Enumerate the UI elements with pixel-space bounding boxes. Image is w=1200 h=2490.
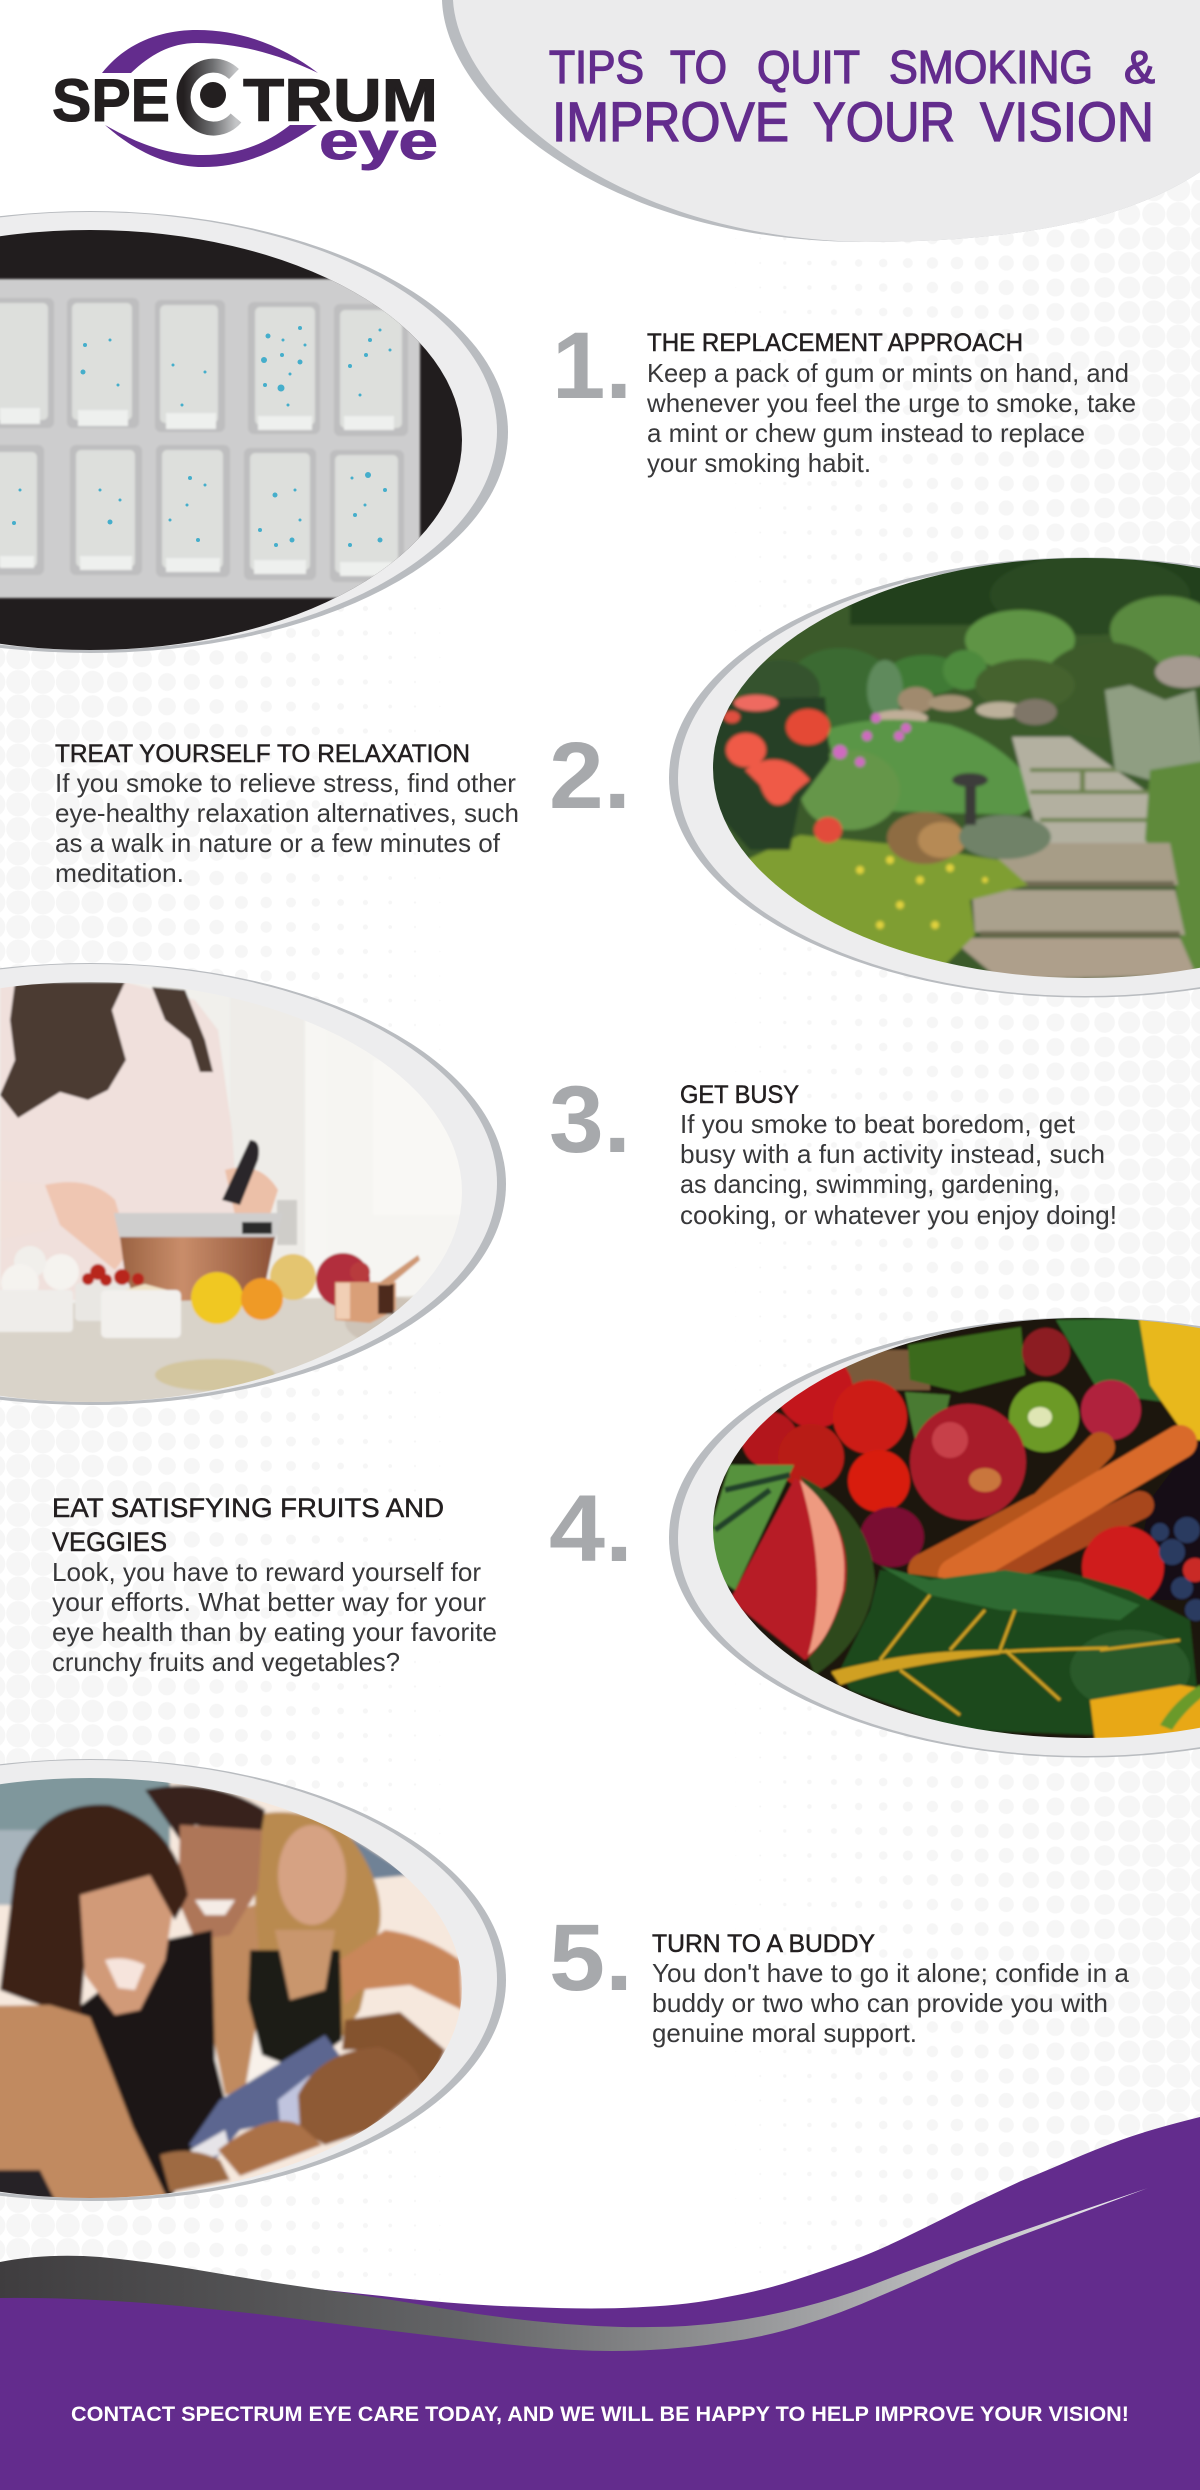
tip 5 text: TURN TO A BUDDY [652, 1930, 875, 1958]
panel: tip 4 photo of fruits and vegetables [669, 1310, 1200, 1758]
tip 4 text [52, 1493, 497, 1677]
tip 1 text: Keep a pack of gum or mints on hand, and [647, 358, 1129, 388]
logo: Spectrum Eye: TRUM [243, 67, 438, 134]
tip 4 text: eye health than by eating your favorite [52, 1617, 497, 1647]
tip 5 number: 5. [549, 1905, 633, 2011]
tip 1 text: whenever you feel the urge to smoke, take [646, 388, 1136, 418]
tip 4 text: your efforts. What better way for your [52, 1587, 486, 1617]
tip 1 text [646, 329, 1136, 478]
title: TO [670, 41, 727, 93]
tip 1 number: 1. [552, 313, 632, 419]
tip 3 number: 3. [549, 1067, 631, 1173]
footer purple wave [0, 2117, 1200, 2490]
tip 1 text: your smoking habit. [647, 448, 871, 478]
tip 4 text: VEGGIES [52, 1527, 167, 1557]
title [549, 41, 1155, 153]
tip 1 text: THE REPLACEMENT APPROACH [647, 329, 1023, 357]
footer grey swoosh [0, 2188, 1148, 2351]
logo: Spectrum Eye [52, 30, 438, 171]
tip 4 number: 4. [549, 1476, 633, 1582]
tip 2 text: TREAT YOURSELF TO RELAXATION [55, 740, 470, 768]
tip 3 text [680, 1081, 1117, 1230]
tip 3 text: If you smoke to beat boredom, get [680, 1109, 1076, 1139]
tip 2 text: as a walk in nature or a few minutes of [55, 828, 501, 858]
tip 4 text: Look, you have to reward yourself for [52, 1557, 481, 1587]
tip 2 text: If you smoke to relieve stress, find other [55, 768, 516, 798]
title: QUIT [757, 41, 860, 93]
tip 5 text: genuine moral support. [652, 2018, 917, 2048]
logo: Spectrum Eye: SPE [52, 67, 170, 134]
tip 2 text [55, 740, 519, 888]
panel: tip 1 photo of gum [0, 211, 508, 655]
header blob [442, 0, 1200, 242]
tip 5 text [652, 1930, 1130, 2048]
panel: tip 3 photo of cooking in a kitchen [0, 963, 506, 1410]
tip 2 text: eye-healthy relaxation alternatives, such [55, 798, 519, 828]
logo: Spectrum Eye: eye [319, 112, 438, 171]
panel: tip 5 photo of laughing friends [0, 1759, 506, 2210]
title: IMPROVE [552, 90, 789, 153]
tip 4 text: EAT SATISFYING FRUITS AND [52, 1493, 444, 1523]
title: VISION [980, 90, 1154, 153]
tip 3 text: GET BUSY [680, 1081, 799, 1109]
tip 3 text: as dancing, swimming, gardening, [680, 1169, 1060, 1199]
tip 5 text: buddy or two who can provide you with [652, 1988, 1108, 2018]
tip 2 text: meditation. [55, 858, 184, 888]
footer call to action: CONTACT SPECTRUM EYE CARE TODAY, AND WE WILL BE HAPPY TO HELP IMPROVE YOUR VISION! [71, 2403, 1129, 2426]
title: TIPS [549, 41, 644, 93]
tip 3 text: busy with a fun activity instead, such [680, 1139, 1105, 1169]
title: SMOKING [889, 41, 1093, 93]
panel: tip 2 photo of garden path [669, 550, 1200, 998]
title: & [1124, 41, 1155, 93]
tip 3 text: cooking, or whatever you enjoy doing! [680, 1200, 1117, 1230]
tip 1 text: a mint or chew gum instead to replace [647, 418, 1085, 448]
tip 4 text: crunchy fruits and vegetables? [52, 1647, 400, 1677]
tip 2 number: 2. [549, 723, 631, 829]
tip 5 text: You don't have to go it alone; confide in a [652, 1958, 1130, 1988]
title: YOUR [813, 90, 955, 153]
